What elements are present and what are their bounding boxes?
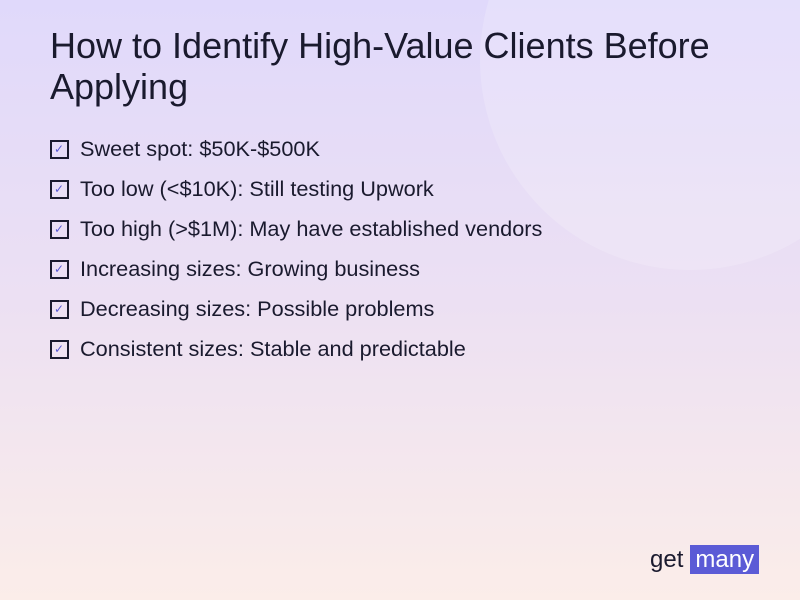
item 5: Decreasing sizes: Possible problems	[80, 296, 434, 321]
checklist	[50, 136, 542, 361]
logo: many	[695, 546, 754, 573]
logo	[650, 545, 759, 574]
logo: get	[650, 546, 683, 572]
item 4: ✓	[54, 262, 64, 276]
item 2: Too low (<$10K): Still testing Upwork	[80, 176, 434, 201]
item 2: ✓	[54, 182, 64, 196]
item 6: ✓	[54, 342, 64, 356]
item 1: ✓	[54, 142, 64, 156]
item 3: Too high (>$1M): May have established vendors	[80, 216, 542, 241]
item 5: ✓	[54, 302, 64, 316]
item 4: Increasing sizes: Growing business	[80, 256, 420, 281]
item 6: Consistent sizes: Stable and predictable	[80, 336, 466, 361]
item 3: ✓	[54, 222, 64, 236]
item 1: Sweet spot: $50K-$500K	[80, 136, 320, 161]
title: How to Identify High-Value Clients Before Applying	[50, 25, 710, 107]
